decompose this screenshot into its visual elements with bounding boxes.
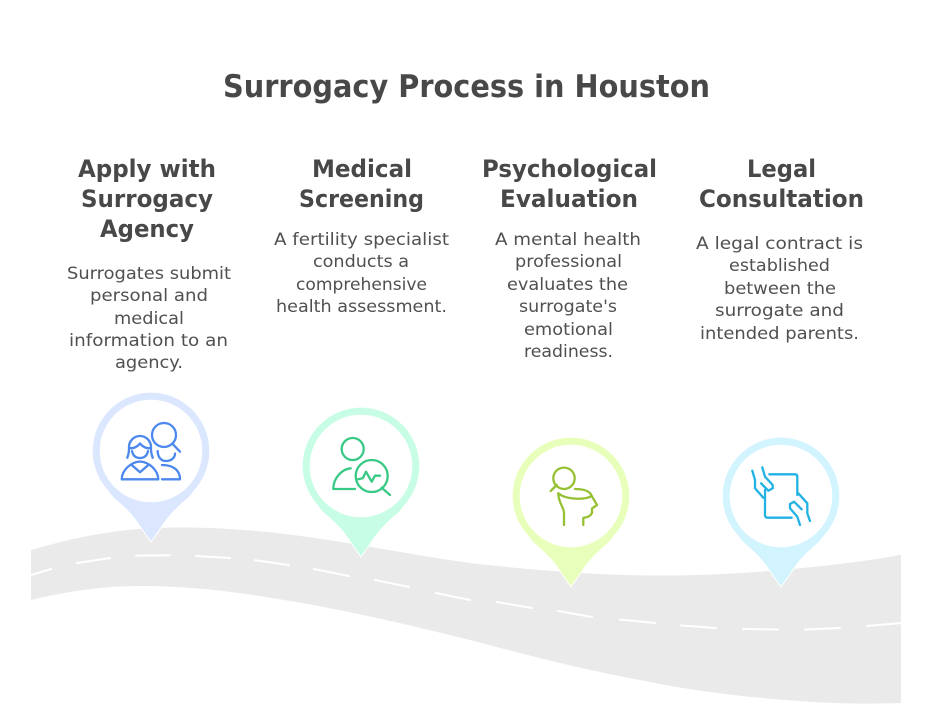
heading: psychological evaluation: [482, 155, 657, 213]
road: [31, 527, 901, 704]
title: Surrogacy Process in Houston: [223, 69, 710, 105]
text: step 2 description: conducts a: [313, 252, 409, 272]
text: step 3 description: [495, 230, 641, 362]
text: step 3 description: professional: [515, 252, 622, 272]
step 3: psychological evaluation: [482, 155, 657, 586]
text: step 1 description: Surrogates submit: [67, 264, 231, 284]
text: step 4 description: established: [729, 256, 830, 276]
pin: step 3: [513, 438, 629, 586]
text: step 4 description: intended parents.: [700, 324, 859, 344]
icon: people with magnifier: [122, 423, 180, 479]
pin: step 4: [723, 438, 839, 586]
text: step 4 description: A legal contract is: [696, 234, 863, 254]
heading: apply with surrogacy agency: Surrogacy: [81, 185, 213, 213]
text: step 4 description: between the: [724, 279, 836, 299]
text: step 2 description: [274, 230, 449, 317]
text: step 3 description: emotional: [524, 320, 613, 340]
pin: step 1: [93, 393, 209, 541]
text: step 2 description: comprehensive: [296, 275, 427, 295]
heading: apply with surrogacy agency: Apply with: [78, 155, 216, 183]
pin: step 2: [303, 408, 419, 556]
text: step 3 description: readiness.: [524, 342, 613, 362]
step 2: medical screening: [274, 155, 449, 556]
heading: psychological evaluation: Psychological: [482, 155, 657, 183]
heading: medical screening: Screening: [299, 185, 424, 213]
text: step 2 description: A fertility specialist: [274, 230, 449, 250]
text: step 4 description: [696, 234, 863, 344]
heading: medical screening: [299, 155, 424, 213]
text: step 1 description: personal and: [90, 286, 208, 306]
icon: hands holding document: [752, 467, 810, 525]
step 1: apply with surrogacy agency: [67, 155, 231, 541]
text: step 1 description: agency.: [115, 353, 183, 373]
heading: medical screening: Medical: [312, 155, 412, 183]
text: step 2 description: health assessment.: [276, 297, 447, 317]
text: step 1 description: [67, 264, 231, 373]
heading: apply with surrogacy agency: Agency: [100, 215, 194, 243]
text: step 3 description: A mental health: [495, 230, 641, 250]
heading: legal consultation: Legal: [747, 155, 816, 183]
heading: psychological evaluation: Evaluation: [500, 185, 638, 213]
heading: legal consultation: Consultation: [699, 185, 864, 213]
heading: apply with surrogacy agency: [78, 155, 216, 243]
text: step 4 description: surrogate and: [715, 301, 844, 321]
text: step 1 description: medical: [114, 309, 184, 329]
text: step 1 description: information to an: [69, 331, 228, 351]
step 4: legal consultation: [696, 155, 864, 586]
text: step 3 description: surrogate's: [519, 297, 617, 317]
icon: head with magnifier: [551, 468, 597, 525]
heading: legal consultation: [699, 155, 864, 213]
icon: person with health magnifier: [333, 438, 390, 495]
text: step 3 description: evaluates the: [507, 275, 628, 295]
